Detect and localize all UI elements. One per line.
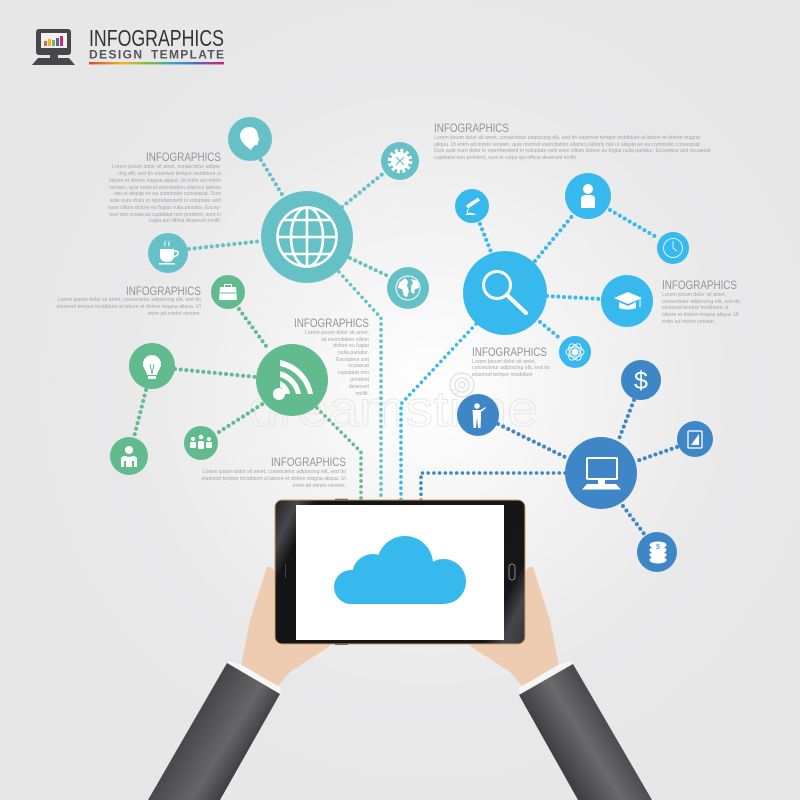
text block: green bottom: eiusmod tempor incididunt ut labore et dolore magna aliqua. Ut [202,476,347,482]
text block: top left: cing elit, sed do eiusmod tempor incididunt ut [117,171,222,177]
hub: magnifier [463,251,547,335]
text block: blue right: consectetur adipiscing elit, sed do [662,299,740,305]
icon: graduation cap [601,275,653,327]
text block: green right: mollit. [355,391,369,397]
text block: green right: deserunt [349,384,370,390]
icon: person [110,437,148,475]
text block: green bottom [202,455,347,489]
text block: green right: Lorem ipsum dolor sit amet, [305,330,369,336]
text block: green right: INFOGRAPHICS [294,316,369,330]
icon: earth [387,267,429,309]
text block: top left: labore et dolore magna aliqua. Ut enim ad minim [109,178,221,184]
tablet [275,499,525,645]
text block: top right: Lorem ipsum dolor sit amet, consectetur adipiscing elit, sed do eiusmod tempor incididunt ut labore et dolore magna [434,135,700,141]
text block: blue bottom: INFOGRAPHICS [472,345,547,359]
icon: cloud [334,536,466,604]
text block: blue bottom: consectetur adipiscing elit, sed do [472,365,550,371]
text block: top left: Lorem ipsum dolor sit amet, consectetur adipis- [112,164,221,170]
icon: tablet chart [677,421,713,457]
text block: green left: eiusmod tempor incididunt ut labore et dolore magna aliqua. Ut [57,304,202,310]
text block: blue right [662,278,740,325]
hub: computer [565,437,637,509]
icon: atom [559,336,591,368]
icon: coffee cup [148,233,188,273]
text block: blue right: enim ad minim veniam. [662,319,715,325]
text block: top right: INFOGRAPHICS [434,121,509,135]
icon: microscope [455,189,489,223]
icon: coins: $ [656,544,660,551]
light blue connectors [401,210,658,500]
text block: green right: nulla pariatur. [338,350,369,356]
right arm with cuff [519,661,652,800]
text block: blue bottom [472,345,550,378]
text block: blue bottom: Lorem ipsum dolor sit amet, [472,359,536,365]
header title: DESIGN [89,48,142,62]
text block: green left: Lorem ipsum dolor sit amet, consectetur adipiscing elit, sed do [58,297,201,303]
text block: green right [294,316,370,397]
text block: green right: occaecat [348,363,370,369]
header title [89,25,224,64]
icon: gear [381,142,419,180]
icon: light bulb [129,343,175,389]
hub: globe [261,191,353,283]
text block: top left: INFOGRAPHICS [146,150,221,164]
text block: blue right: labore et dolore magna aliqua. Ut [662,312,739,318]
left arm with cuff [148,661,281,800]
text block: top left: culpa qui officia deserunt mollit. [149,218,221,224]
header title: TEMPLATE [151,48,224,62]
icon: dollar [621,360,661,400]
icon: briefcase [211,275,245,309]
header logo: monitor icon [32,29,75,65]
text block: green bottom: enim ad minim veniam. [293,483,346,489]
icon: group of people [184,426,218,460]
dark blue connectors [421,400,677,535]
text block: green left: enim ad minim veniam. [148,311,201,317]
text block: green right: cupidatat non [338,370,369,376]
header title: INFOGRAPHICS [89,25,224,51]
text block: top left: nisi ut aliquip ex ea commodo consequat. Duis [114,191,221,197]
text block: green bottom: Lorem ipsum dolor sit amet, consectetur adipiscing elit, sed do [203,469,346,475]
text block: green left: INFOGRAPHICS [126,284,201,298]
text block: blue right: INFOGRAPHICS [662,278,737,292]
icon: clock [657,232,689,264]
text block: green right: proident [350,377,370,383]
left hand [241,567,330,686]
teal connectors [189,160,390,500]
text block: blue bottom: eiusmod tempor incididunt [472,372,533,378]
text block: top right: cupidatat non proident, sunt in culpa qui officia deserunt mollit. [434,155,577,161]
text block: top left: veniam, quis nostrud exercitation ullamco laboris [109,185,221,191]
right hand [470,567,559,686]
green connectors [134,309,361,500]
text block: green bottom: INFOGRAPHICS [271,455,346,469]
hub: rss [256,344,328,416]
icon: coins [637,532,677,572]
text block: blue right: eiusmod tempor incididunt ut [662,305,729,311]
text block: top left: teur sint occaecat cupidatat non proident, sunt in [109,212,221,218]
text block: top right: Duis aute irure dolor in reprehenderit in voluptate velit esse cillum dolore eu fugiat nulla pariatur. Excepteur sint occaecat [434,148,711,154]
text block: top right [434,121,711,161]
text block: green right: sit exercitation cillum [321,337,369,343]
text block: green right: dolore eu fugiat [333,343,370,349]
text block: top left: aute irure dolor in reprehenderit in voluptate velit [110,198,222,204]
watermark: dreamstime [248,381,538,437]
text block: green right: Excepteur sint [336,357,370,363]
icon: user [565,173,611,219]
icon: head [228,117,272,161]
text block: blue right: Lorem ipsum dolor sit amet, [662,292,726,298]
icon: presenter [457,394,499,436]
text block: top left [108,150,222,224]
text block: top right: aliqua. Ut enim ad minim veniam, quis nostrud exercitation ullamco laboris nisi ut aliquip ex ea commodo consequat. [434,142,701,148]
text block: top left: esse cillum dolore eu fugiat nulla pariatur. Excep- [108,205,221,211]
text block: green left [57,284,202,317]
icon: dollar: $ [634,367,648,395]
